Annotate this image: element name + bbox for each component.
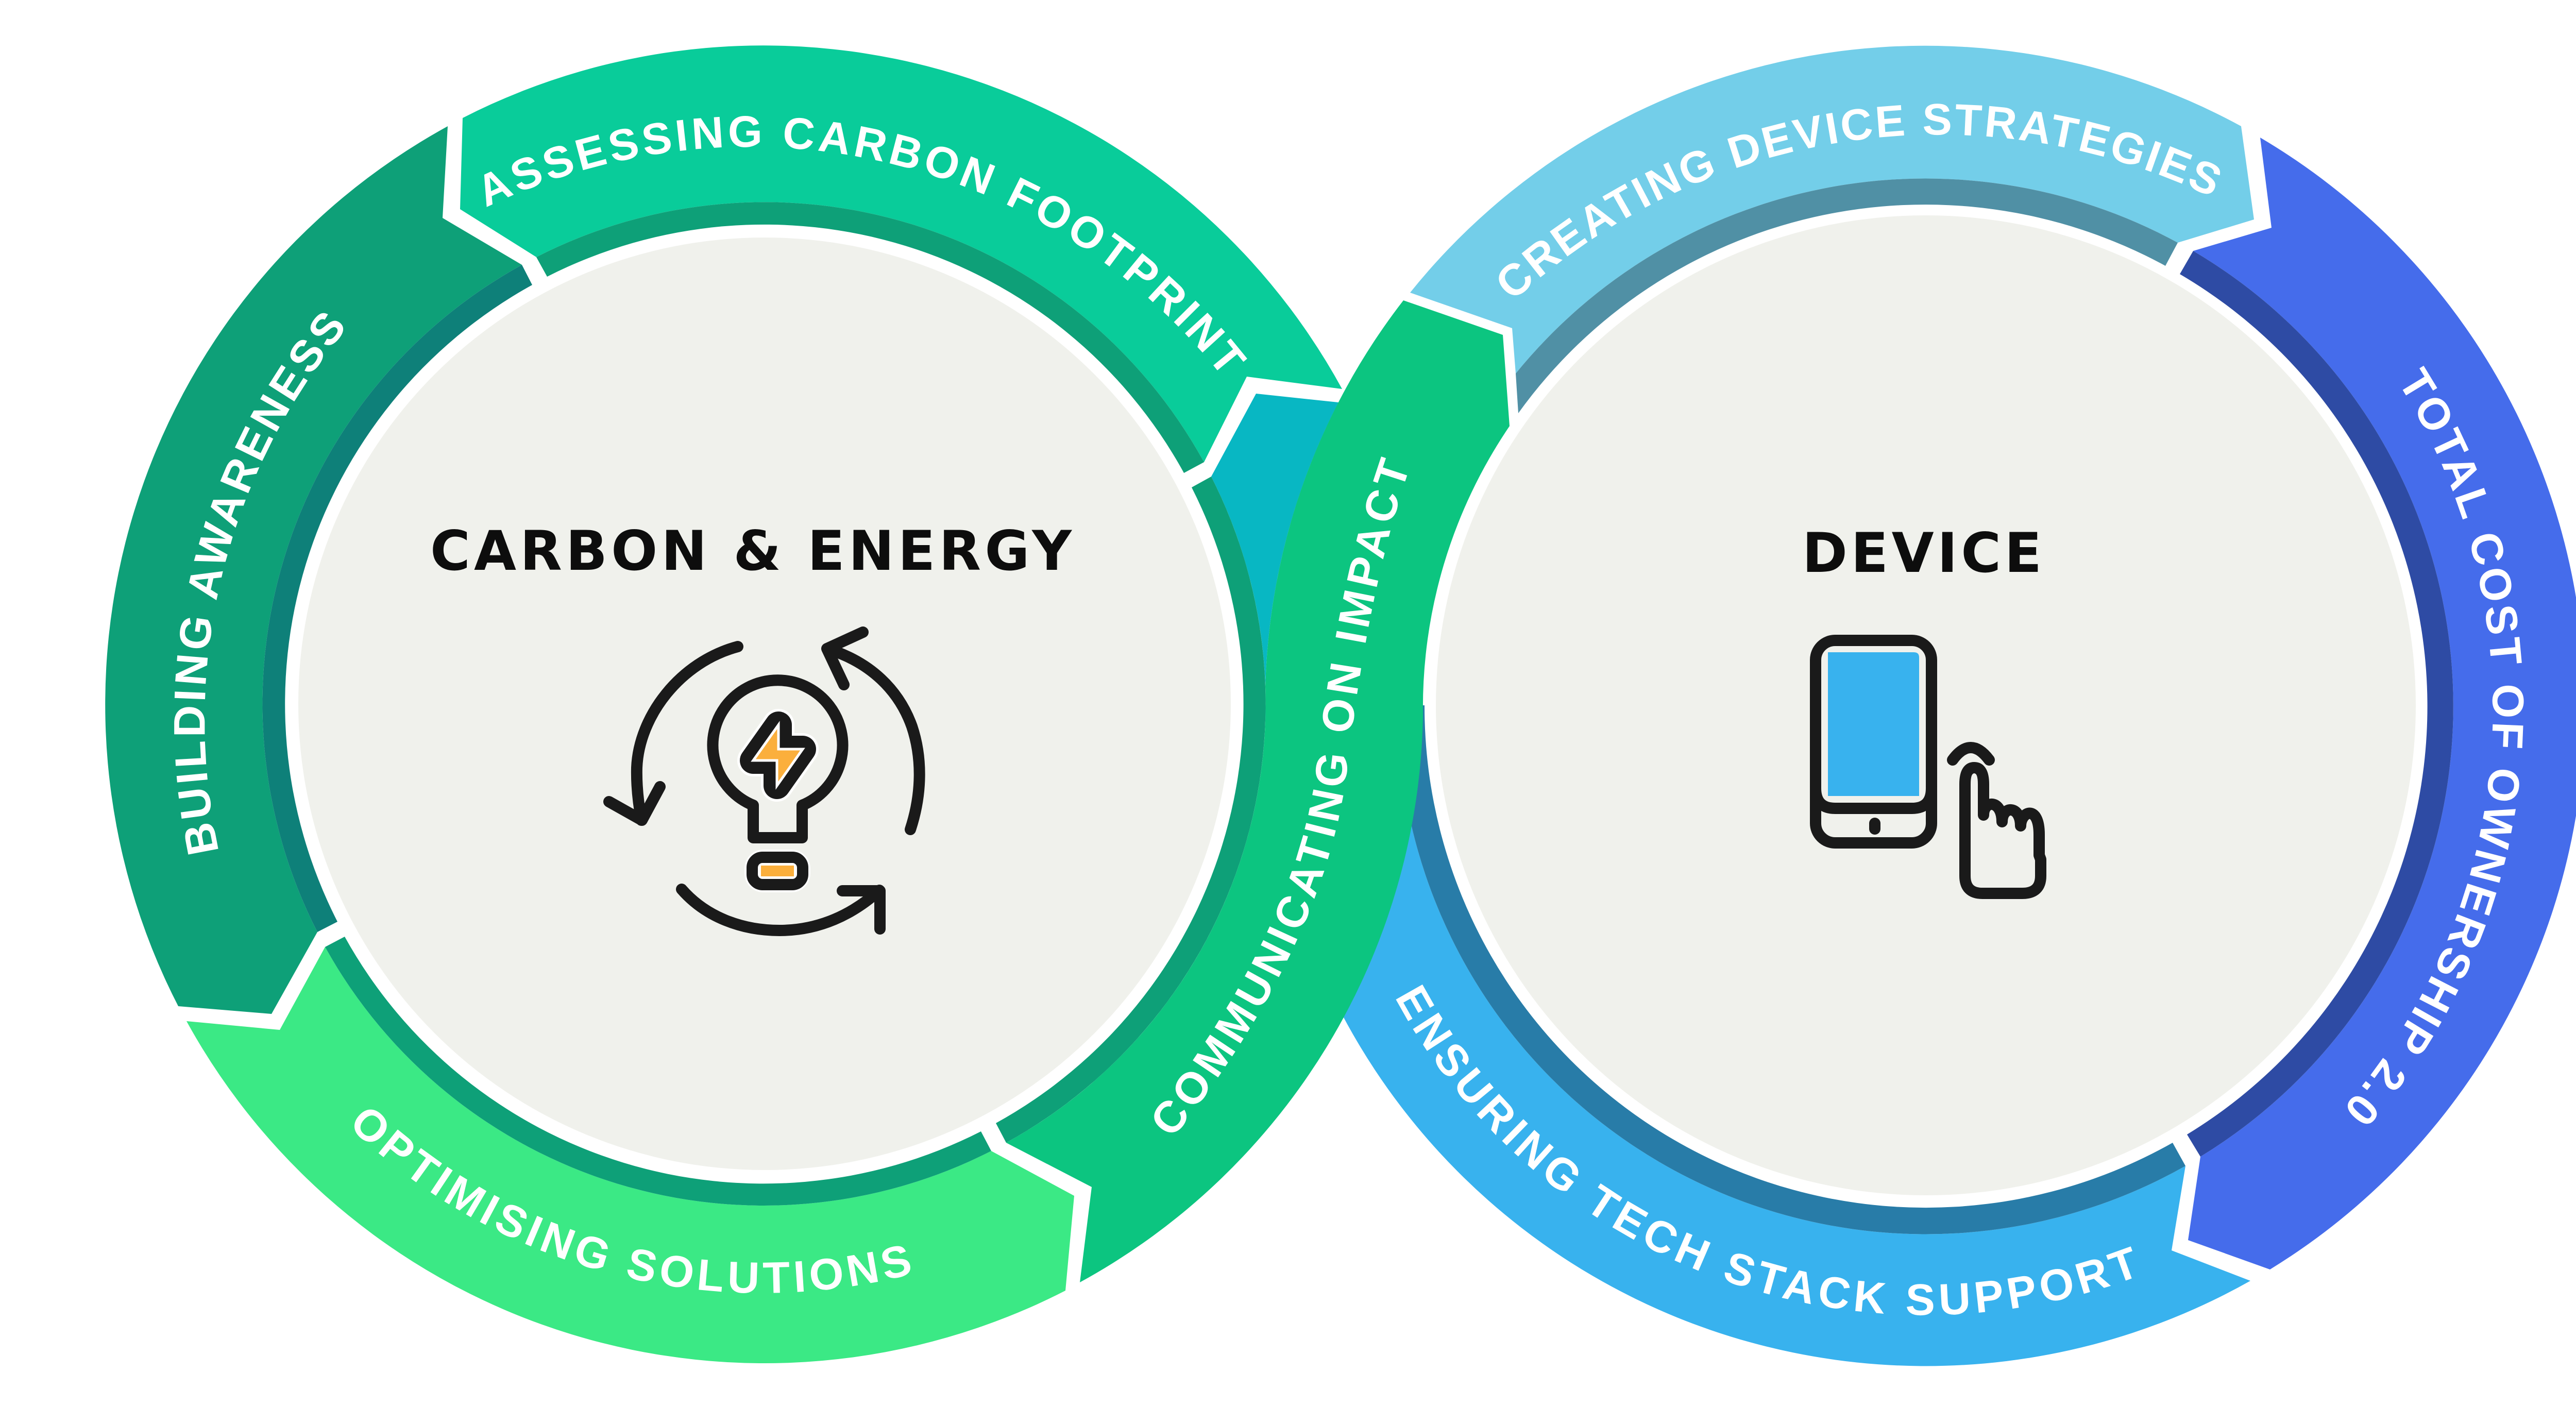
label: communicating on impact: COMMUNICATING ON IMPACT bbox=[1154, 456, 1408, 1132]
segment: teal wedge behind communicating band bbox=[1211, 394, 1338, 686]
phone body bbox=[1816, 640, 1931, 843]
cap fill bbox=[761, 866, 794, 876]
segment: total cost of ownership inner ring bbox=[2180, 251, 2453, 1157]
segment: optimising solutions inner ring bbox=[325, 937, 991, 1206]
arrow: right bbox=[827, 632, 920, 829]
phone home button bbox=[1869, 823, 1880, 829]
segment: ensuring tech stack support inner ring bbox=[1398, 705, 2185, 1234]
bulb outline bbox=[713, 680, 843, 838]
label: assessing carbon footprint: ASSESSING CARBON FOOTPRINT bbox=[484, 116, 1247, 370]
label: building awareness: BUILDING AWARENESS bbox=[174, 313, 343, 855]
label: ensuring tech stack support: ENSURING TECH STACK SUPPORT bbox=[1396, 984, 2132, 1316]
device centre disc bbox=[1436, 215, 2416, 1195]
bolt fill bbox=[753, 725, 803, 786]
phone screen bbox=[1828, 652, 1919, 796]
segment: communicating inner ring bbox=[996, 477, 1266, 1143]
segment: communicating on impact band bbox=[1006, 300, 1510, 1282]
phone divider bbox=[1816, 788, 1931, 808]
label: total cost of ownership 2.0: TOTAL COST OF OWNERSHIP 2.0 bbox=[2348, 366, 2524, 1124]
bolt bbox=[753, 725, 803, 786]
segment: building awareness inner ring bbox=[262, 265, 532, 932]
segment: assessing carbon footprint inner ring bbox=[536, 202, 1204, 473]
cap halo bbox=[752, 857, 803, 885]
bolt white halo bbox=[753, 725, 803, 786]
segment: ensuring tech stack support band bbox=[1265, 705, 2250, 1366]
icon: phone with tapping hand bbox=[1816, 640, 2041, 893]
label: creating device strategies: CREATING DEVICE STRATEGIES bbox=[1499, 104, 2221, 295]
segment: creating device strategies inner ring bbox=[1516, 179, 2178, 413]
arrow: bottom bbox=[682, 889, 880, 930]
segment: creating device strategies band bbox=[1410, 46, 2254, 374]
segment: total cost of ownership band bbox=[2188, 138, 2576, 1269]
icon: light bulb with cycle arrows bbox=[609, 632, 920, 930]
heading: carbon and energy: CARBON & ENERGY bbox=[430, 519, 1072, 583]
panel: device circle bbox=[1265, 45, 2576, 1366]
heading: device: DEVICE bbox=[1802, 521, 2042, 585]
arrow: left bbox=[609, 647, 738, 820]
hand bbox=[1965, 768, 2041, 893]
cap outline bbox=[752, 857, 803, 885]
segment: optimising solutions band bbox=[187, 947, 1074, 1363]
bolt dark outline bbox=[753, 725, 803, 786]
carbon centre disc bbox=[298, 238, 1231, 1170]
label: optimising solutions: OPTIMISING SOLUTIONS bbox=[354, 1110, 910, 1293]
segment: building awareness band bbox=[105, 126, 522, 1014]
tap arc bbox=[1953, 748, 1989, 760]
panel: carbon and energy circle bbox=[105, 45, 1510, 1363]
segment: assessing carbon footprint band bbox=[460, 45, 1342, 462]
bulb cap bbox=[752, 857, 803, 885]
